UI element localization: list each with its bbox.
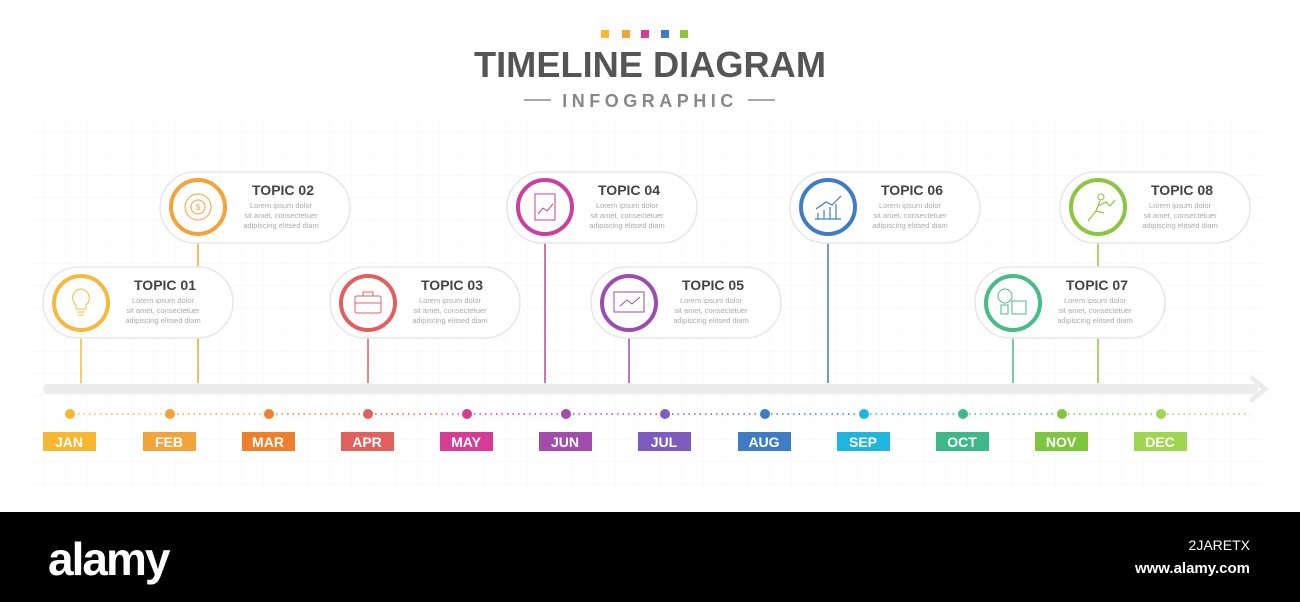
topic 03: adipiscing elitsed diam [412,316,488,325]
topic 08: Lorem ipsum dolor [1149,201,1212,210]
topic 08: TOPIC 08 [1151,182,1213,198]
title color squares [601,30,688,38]
month markers and labels: JAN [55,434,83,450]
topic 02: sit amet, consectetuer [244,211,318,220]
month markers and labels [43,409,1187,451]
connector lines [81,236,1098,383]
topic 01: sit amet, consectetuer [126,306,200,315]
topic 03: sit amet, consectetuer [413,306,487,315]
topic 03 [330,267,520,338]
topic 02: TOPIC 02 [252,182,314,198]
month markers and labels: NOV [1046,434,1077,450]
topic 07: Lorem ipsum dolor [1064,296,1127,305]
topic 02: Lorem ipsum dolor [250,201,313,210]
month markers and labels: MAR [252,434,284,450]
topic 06: Lorem ipsum dolor [879,201,942,210]
topic 07: TOPIC 07 [1066,277,1128,293]
topic 06: TOPIC 06 [881,182,943,198]
topic 06: sit amet, consectetuer [873,211,947,220]
topic 08: sit amet, consectetuer [1143,211,1217,220]
topic 01: TOPIC 01 [134,277,196,293]
topic 04: Lorem ipsum dolor [596,201,659,210]
topic 05: Lorem ipsum dolor [680,296,743,305]
topic 01: adipiscing elitsed diam [125,316,201,325]
topic 03: TOPIC 03 [421,277,483,293]
topic 05: adipiscing elitsed diam [673,316,749,325]
topic 07 [975,267,1165,338]
month markers and labels: AUG [748,434,780,450]
topic 04: adipiscing elitsed diam [589,221,665,230]
topic 01 [43,267,233,338]
topic 04 [507,172,697,243]
topic 06 [790,172,980,243]
month markers and labels: JUL [651,434,678,450]
topic 04: sit amet, consectetuer [590,211,664,220]
month markers and labels: SEP [849,434,877,450]
topic 06: adipiscing elitsed diam [872,221,948,230]
month markers and labels: JUN [551,434,579,450]
topic 02: $ [196,203,201,212]
footer bar [0,512,1300,602]
month markers and labels: FEB [155,434,183,450]
month markers and labels: MAY [451,434,482,450]
topic 08: adipiscing elitsed diam [1142,221,1218,230]
title: TIMELINE DIAGRAM [474,44,826,85]
footer bar: www.alamy.com [1134,560,1250,577]
month markers and labels: DEC [1145,434,1175,450]
topic 05 [591,267,781,338]
topic 08 [1060,172,1250,243]
topic 07: sit amet, consectetuer [1058,306,1132,315]
timeline bar arrow [43,378,1265,400]
month markers and labels: APR [352,434,382,450]
topic 03: Lorem ipsum dolor [419,296,482,305]
topic 01: Lorem ipsum dolor [132,296,195,305]
topic 05: sit amet, consectetuer [674,306,748,315]
topic 04: TOPIC 04 [598,182,660,198]
footer bar: 2JARETX [1189,537,1251,553]
footer bar: alamy [48,533,171,585]
dotted month line [78,413,1250,415]
month markers and labels: OCT [947,434,977,450]
topic 05: TOPIC 05 [682,277,744,293]
topic 02 [160,172,350,243]
subtitle: INFOGRAPHIC [562,91,738,111]
topic 02: adipiscing elitsed diam [243,221,319,230]
topic 07: adipiscing elitsed diam [1057,316,1133,325]
